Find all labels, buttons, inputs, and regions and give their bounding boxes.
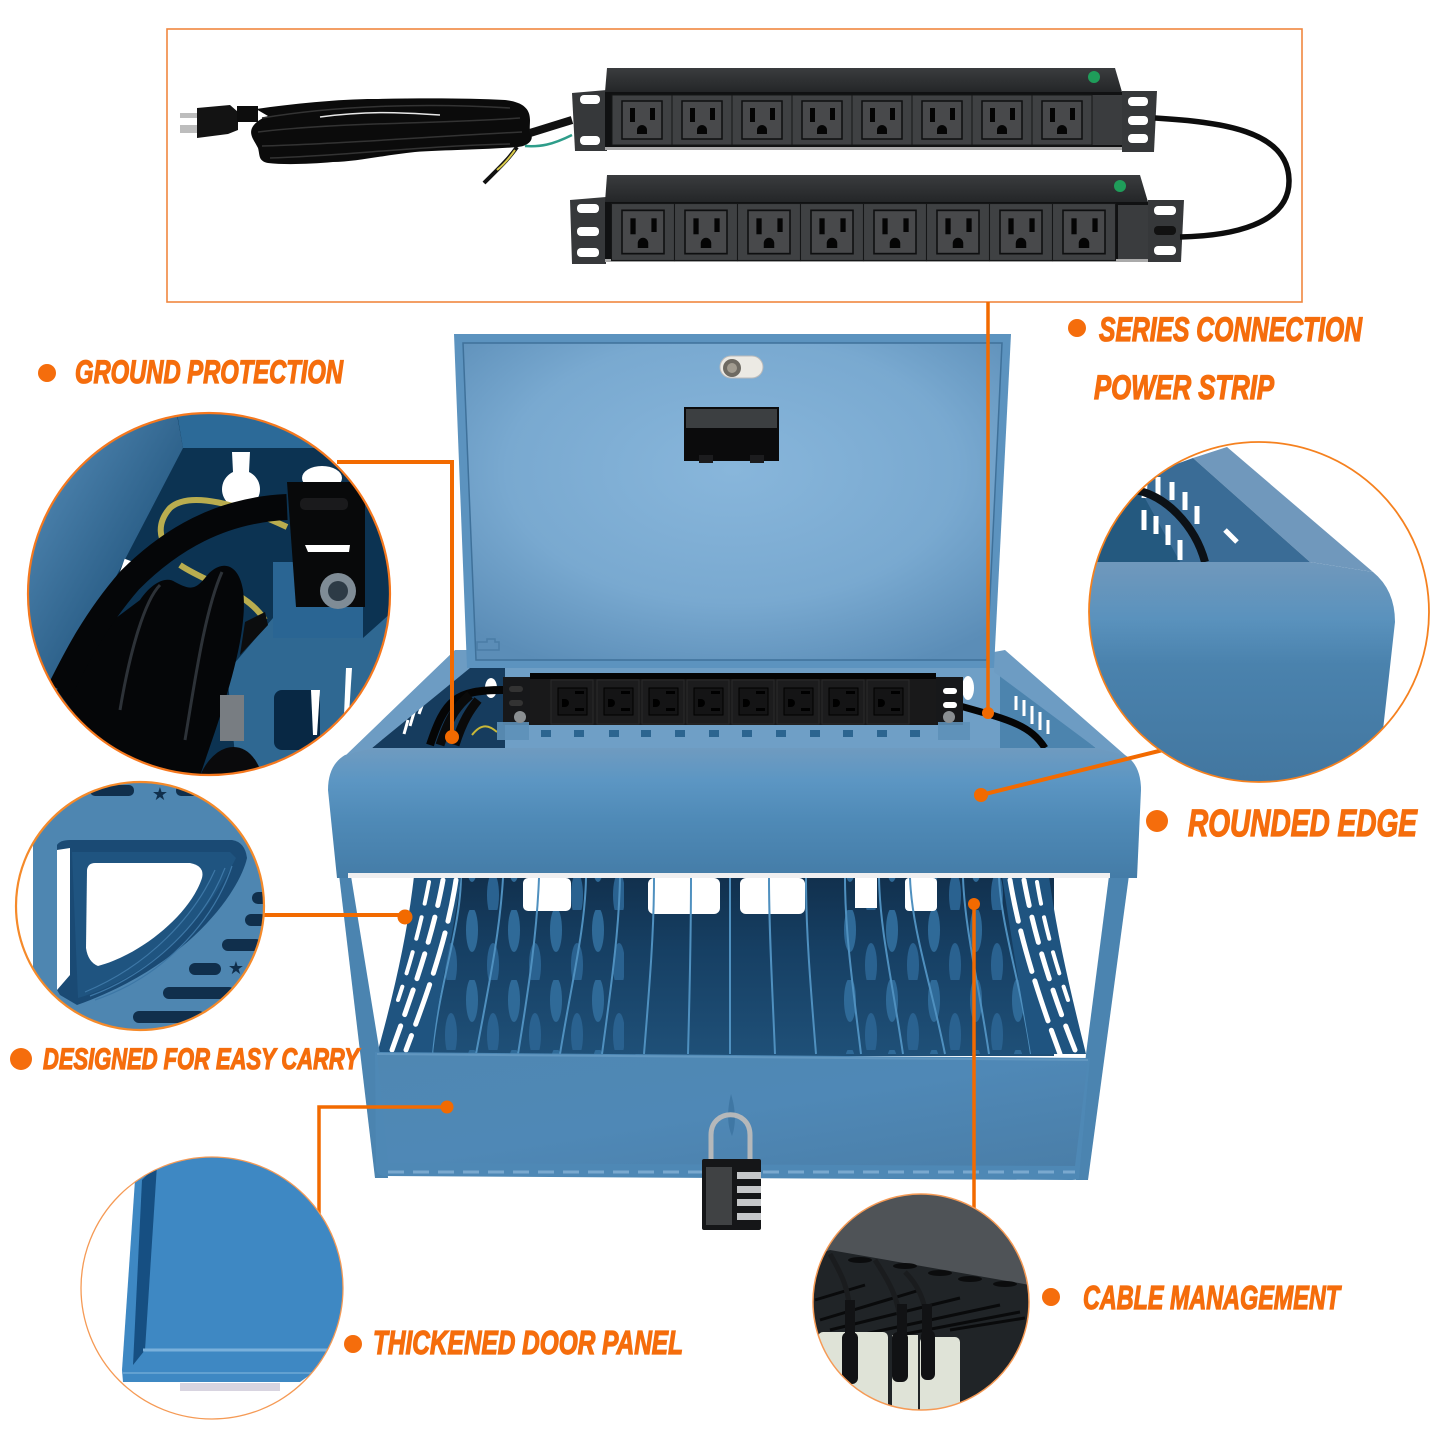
label: designed for easy carry: DESIGNED FOR EASY CARRY <box>43 1043 361 1076</box>
power cord with plug <box>180 98 598 183</box>
perforated right side wall <box>1002 876 1086 1054</box>
panel: series connection power strips box <box>167 29 1302 302</box>
lid handle <box>684 407 779 463</box>
label: series connection power strip: POWER STRIP <box>1094 369 1274 407</box>
detail circle: designed for easy carry: ★ <box>152 784 168 804</box>
combination padlock <box>702 1094 761 1230</box>
detail circle: rounded edge <box>1089 442 1430 790</box>
detail circle: designed for easy carry: ★ <box>228 958 244 978</box>
detail circle: ground protection <box>20 405 392 776</box>
label: ground protection <box>38 354 344 390</box>
lower compartment with dividers <box>351 876 1111 1056</box>
label: thickened door panel: THICKENED DOOR PANEL <box>373 1324 683 1361</box>
detail circle: cable management <box>813 1194 1030 1417</box>
label: ground protection: GROUND PROTECTION <box>75 354 344 390</box>
interior of upper compartment <box>372 668 1096 748</box>
lid latch <box>720 356 763 378</box>
power strip 2 <box>570 175 1184 264</box>
label: designed for easy carry <box>10 1043 361 1076</box>
cabinet <box>328 334 1141 1230</box>
connector: easy carry <box>264 910 412 924</box>
label: cable management <box>1042 1279 1342 1316</box>
lid side lips <box>346 650 470 772</box>
connector: rounded edge <box>974 750 1163 802</box>
label: thickened door panel <box>344 1324 683 1361</box>
connector: cable management <box>968 898 980 1210</box>
connector: series power strip <box>982 302 994 719</box>
back-wall openings <box>523 878 937 914</box>
connector: ground protection <box>337 462 459 744</box>
cabinet side legs <box>333 824 388 1178</box>
detail circle: thickened door panel <box>81 1150 345 1419</box>
small power strip in cabinet <box>497 673 970 740</box>
front rounded band <box>328 748 1141 878</box>
connector: door panel <box>319 1100 454 1215</box>
label: series connection power strip <box>1068 311 1363 407</box>
perforated left side wall <box>377 876 461 1054</box>
open lid <box>454 334 1011 668</box>
front door panel <box>375 1052 1090 1180</box>
power strip 1 <box>572 68 1157 152</box>
series cable between strips <box>1155 118 1289 237</box>
label: cable management: CABLE MANAGEMENT <box>1083 1279 1342 1316</box>
detail circle: designed for easy carry <box>16 782 268 1031</box>
